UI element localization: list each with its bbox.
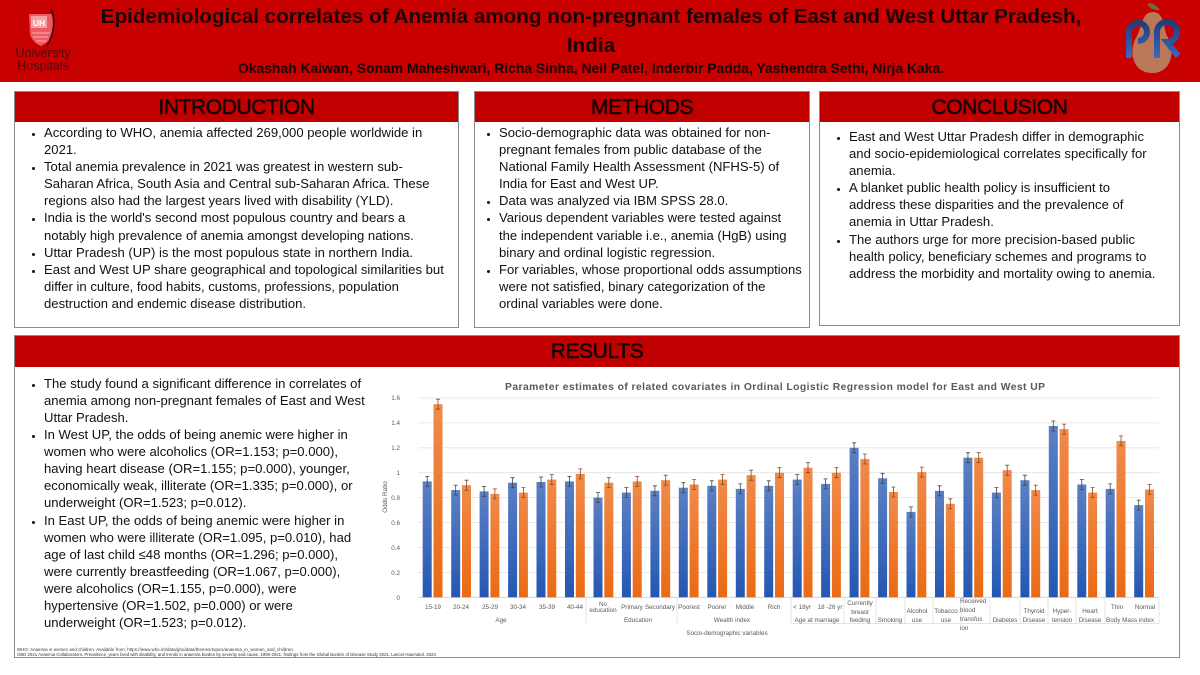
x axis labels: Heart [1082, 608, 1098, 615]
heading: methods [475, 92, 809, 122]
gridlines and y axis: 0.2 [391, 570, 400, 577]
x axis labels: Alcohol [907, 608, 927, 615]
x axis labels [425, 598, 1155, 637]
methods bullets: Data was analyzed via IBM SPSS 28.0. [499, 193, 728, 208]
conclusion bullets: and socio-epidemiological correlates specifically for [849, 146, 1147, 161]
methods bullets: National Family Health Assessment (NFHS-5) of [499, 159, 779, 174]
heading: results: RESULTS [551, 340, 643, 363]
methods bullets: were not satisfied, binary categorization of the [499, 279, 765, 294]
x axis labels: Socio-demographic variables [686, 630, 768, 637]
introduction bullets: regions also had the largest years lived with disability (YLD). [44, 193, 393, 208]
conclusion bullets: address the morbidity and mortality owing to anemia. [849, 266, 1155, 281]
x axis labels: Currently [847, 600, 874, 607]
results bullets: hypertensive (OR=1.502, p=0.000) or were [44, 598, 293, 613]
title: India [567, 34, 615, 57]
x axis labels: 30-34 [510, 604, 527, 611]
x axis labels: Secondary [645, 604, 676, 611]
results bullets: were currently breastfeeding (OR=1.067, p=0.000), [44, 564, 340, 579]
gridlines and y axis: 1.2 [391, 445, 400, 452]
results bullets: age of last child ≤48 months (OR=1.296; p=0.000), [44, 547, 338, 562]
x axis labels: Thin [1111, 604, 1124, 611]
results bullets: women who were illiterate (OR=1.095, p=0.010), had [44, 530, 351, 545]
error bars blue [425, 421, 1141, 517]
x axis labels: transfus [960, 616, 982, 623]
results bullets: economically weak, illiterate (OR=1.335; p=0.000), or [44, 478, 353, 493]
x axis labels: ion [960, 625, 969, 632]
x axis labels: 35-39 [539, 604, 556, 611]
category dividers [586, 597, 1159, 625]
x axis labels: Primary [621, 604, 644, 611]
results bullets: underweight (OR=1.523; p=0.012). [44, 615, 246, 630]
x axis labels: 40-44 [567, 604, 584, 611]
x axis labels: Disease [1023, 617, 1046, 624]
x axis labels: Wealth index [714, 617, 751, 624]
blue series bars [423, 426, 1143, 597]
x axis labels: Age at marriage [795, 617, 840, 624]
x axis labels: Rich [768, 604, 781, 611]
x axis labels: Poorest [678, 604, 700, 611]
conclusion bullets: health policy, beneficiary schemes and programs to [849, 249, 1146, 264]
x axis labels: Normal [1135, 604, 1155, 611]
x axis labels: Education [624, 617, 652, 624]
panel: conclusion [819, 91, 1180, 326]
methods bullets: the independent variable i.e., anemia (HgB) using [499, 228, 787, 243]
methods bullets: Various dependent variables were tested against [499, 210, 781, 225]
heading: introduction: INTRODUCTION [158, 96, 315, 119]
results bullets: were alcoholics (OR=1.155, p=0.000), were [44, 581, 297, 596]
chart title: Parameter estimates of related covariates in Ordinal Logistic Regression model for East and West UP [505, 382, 1045, 393]
x axis labels: 25-29 [482, 604, 499, 611]
x axis labels: Hyper- [1053, 608, 1071, 615]
orange series bars [434, 404, 1154, 597]
x axis labels: use [912, 617, 923, 624]
results bullets: underweight (OR=1.523; p=0.012). [44, 495, 246, 510]
panel: results [14, 335, 1180, 658]
heading: results [15, 336, 1179, 367]
gridlines and y axis: 0.8 [391, 495, 400, 502]
gridlines and y axis: 0.4 [391, 545, 400, 552]
introduction bullets [32, 125, 444, 311]
introduction bullets: Uttar Pradesh (UP) is the most populous state in northern India. [44, 245, 413, 260]
header banner [0, 0, 1200, 82]
x axis labels: Poorer [708, 604, 726, 611]
introduction bullets: East and West UP share geographical and topological similarities but [44, 262, 444, 277]
x axis labels: Age [495, 617, 507, 624]
results bullets [32, 376, 365, 630]
introduction bullets: India is the world's second most populous country and bears a [44, 210, 405, 225]
conclusion bullets: A blanket public health policy is insufficient to [849, 180, 1110, 195]
methods bullets: For variables, whose proportional odds assumptions [499, 262, 802, 277]
x axis labels: Received [960, 598, 987, 605]
methods bullets: binary and ordinal logistic regression. [499, 245, 715, 260]
introduction bullets: 2021. [44, 142, 77, 157]
logo: PR pear [1126, 3, 1180, 73]
error bars orange [436, 399, 1152, 509]
x axis labels: Thyroid [1024, 608, 1045, 615]
x axis labels: breast [851, 609, 869, 616]
authors: Okashah Kaiwan, Sonam Maheshwari, Richa Sinha, Neil Patel, Inderbir Padda, Yashendra Sethi, Nirja Kaka. [238, 60, 944, 76]
results bullets: In West UP, the odds of being anemic were higher in [44, 427, 348, 442]
gridlines and y axis: Odds Ratio [382, 481, 389, 513]
logo: University Hospitals [15, 8, 71, 73]
references: GBD 2021 Anaemia Collaborators. Prevalence, years lived with disability, and trends in anaemia burden by severity and cause, 1990-2021: findings from the Global Burden of Disease Study 2021. Lancet Haematol. 2023. [17, 652, 437, 657]
methods bullets: Socio-demographic data was obtained for non- [499, 125, 770, 140]
logo: University Hospitals: University [15, 46, 71, 60]
introduction bullets: notably high prevalence of anemia amongst developing nations. [44, 228, 414, 243]
x axis labels: No [599, 601, 608, 608]
x axis labels: education [589, 607, 617, 614]
results bullets: Uttar Pradesh. [44, 410, 128, 425]
results bullets: The study found a significant difference in correlates of [44, 376, 361, 391]
results bullets: In East UP, the odds of being anemic were higher in [44, 512, 344, 528]
introduction bullets: differ in culture, food habits, customs, professions, population [44, 279, 399, 294]
gridlines and y axis: 1.4 [391, 420, 400, 427]
gridlines and y axis: 1.6 [391, 395, 400, 402]
introduction bullets: According to WHO, anemia affected 269,000 people worldwide in [44, 125, 422, 140]
results bullets: anemia among non-pregnant females of East and West [44, 393, 365, 408]
conclusion bullets [837, 129, 1155, 281]
title: Epidemiological correlates of Anemia among non-pregnant females of East and West Uttar Pradesh, [101, 5, 1081, 28]
introduction bullets: Total anemia prevalence in 2021 was greatest in western sub- [44, 159, 403, 174]
heading: conclusion [820, 92, 1179, 122]
logo: University Hospitals: UH [33, 18, 45, 28]
heading: introduction [15, 92, 458, 122]
introduction bullets: destruction and endemic disease distribution. [44, 296, 306, 311]
x axis labels: Middle [736, 604, 755, 611]
gridlines and y axis: 0.6 [391, 520, 400, 527]
methods bullets: India for East and West UP. [499, 176, 659, 191]
results bullets: having heart disease (OR=1.155; p=0.000), younger, [44, 461, 350, 476]
x axis labels: feeding [850, 617, 871, 624]
gridlines and y axis: 0 [396, 595, 400, 602]
x axis labels: Smoking [878, 617, 903, 624]
heading: methods: METHODS [591, 96, 693, 119]
methods bullets: ordinal variables were done. [499, 296, 663, 311]
x axis labels: blood [960, 607, 976, 614]
gridlines and y axis [382, 395, 1159, 602]
logo: University Hospitals: Hospitals [17, 59, 69, 73]
panel: introduction [14, 91, 459, 328]
methods bullets [487, 125, 802, 311]
x axis labels: Tobacco [934, 608, 958, 615]
references: WHO: Anaemia in women and children. Available from: https://www.who.int/data/gho/data/themes/topics/anaemia_in_women_and_children. [17, 647, 294, 652]
results bullets: women who were alcoholics (OR=1.153; p=0.000), [44, 444, 338, 459]
x axis labels: Body Mass index [1106, 617, 1155, 624]
conclusion bullets: anemia. [849, 163, 896, 178]
panel: methods [474, 91, 810, 328]
x axis labels: 15-19 [425, 604, 442, 611]
title [101, 5, 1081, 57]
x axis labels: Disease [1079, 617, 1102, 624]
conclusion bullets: address these disparities and the prevalence of [849, 197, 1123, 212]
x axis labels: 20-24 [453, 604, 470, 611]
x axis labels: Diabetes [993, 617, 1017, 624]
conclusion bullets: anemia in Uttar Pradesh. [849, 214, 994, 229]
heading: conclusion: CONCLUSION [931, 96, 1068, 119]
x axis labels: use [941, 617, 952, 624]
methods bullets: pregnant females from public database of the [499, 142, 762, 157]
introduction bullets: Saharan Africa, South Asia and Central sub-Saharan Africa. These [44, 176, 430, 191]
x axis labels: tension [1052, 617, 1073, 624]
gridlines and y axis: 1 [396, 470, 400, 477]
x axis labels: < 18yr [793, 604, 811, 611]
x axis labels: 18 -26 yr [818, 604, 842, 611]
conclusion bullets: East and West Uttar Pradesh differ in demographic [849, 129, 1144, 144]
conclusion bullets: The authors urge for more precision-based public [849, 232, 1135, 247]
